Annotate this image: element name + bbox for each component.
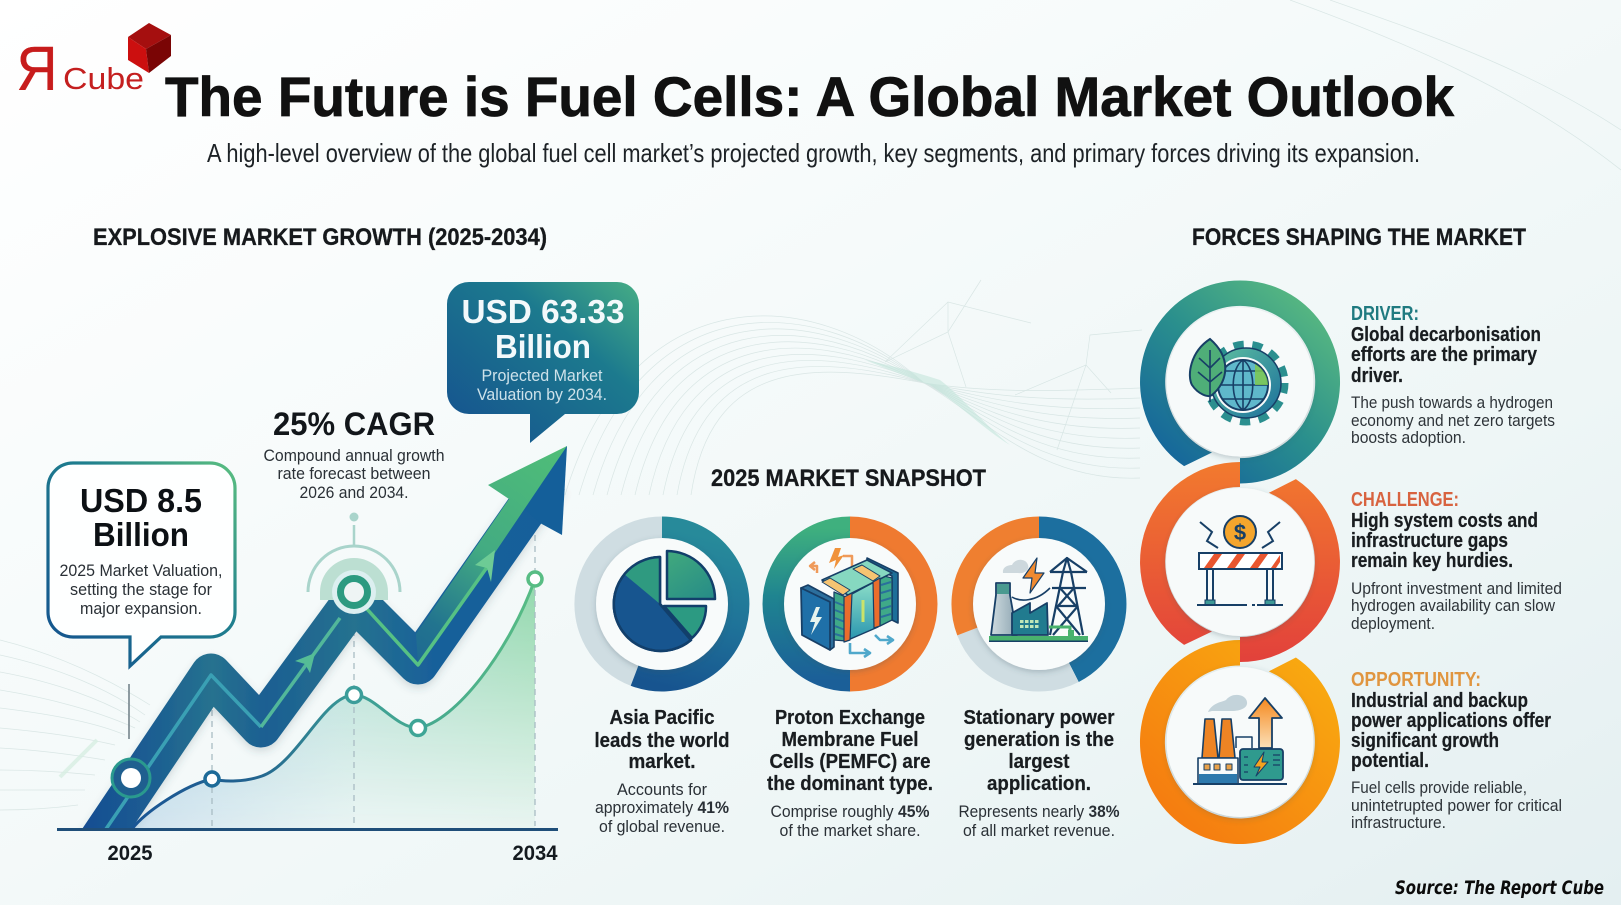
title: The Future is Fuel Cells: A Global Market Outlook	[165, 65, 1455, 128]
vertical marker line	[128, 684, 130, 739]
text: CAGR: 2026 and 2034.	[300, 484, 408, 502]
text: driver: driver.	[1351, 365, 1403, 387]
text: opportunity: OPPORTUNITY:	[1351, 669, 1481, 691]
text: opportunity: potential.	[1351, 750, 1429, 772]
text: stationary power: largest	[1008, 751, 1070, 773]
text: driver: efforts are the primary	[1351, 344, 1538, 366]
text: challenge: remain key hurdies.	[1351, 550, 1513, 572]
text: pemfc: Membrane Fuel	[782, 729, 918, 751]
logo	[16, 23, 171, 104]
callout: 2034 valuation	[447, 282, 639, 443]
icon: cost barrier	[1197, 516, 1283, 605]
text: asia pacific: leads the world	[594, 730, 730, 752]
growth ribbon	[92, 478, 548, 851]
text: challenge: infrastructure gaps	[1351, 530, 1508, 552]
callout: 2034 valuation: Billion	[495, 328, 591, 365]
text: driver: boosts adoption.	[1351, 428, 1466, 447]
logo word: Cube	[63, 61, 144, 96]
text: CAGR: rate forecast between	[278, 465, 430, 483]
convergence glow	[865, 360, 1010, 445]
inner ribbon line rising	[261, 618, 340, 727]
arrow head green	[416, 446, 567, 664]
logo letter: Я	[16, 35, 58, 104]
text: asia pacific: of global revenue.	[599, 818, 725, 836]
text: pemfc: Proton Exchange	[775, 707, 925, 729]
ring: opportunity	[1140, 640, 1340, 844]
marker 2025	[112, 759, 150, 797]
text: CAGR: Compound annual growth	[264, 447, 444, 465]
text: driver: The push towards a hydrogen	[1351, 393, 1553, 412]
donut: pemfc	[774, 528, 926, 680]
text: opportunity: significant growth	[1351, 730, 1499, 752]
area under curve	[154, 588, 535, 825]
text: opportunity: power applications offer	[1351, 710, 1551, 732]
text: driver: economy and net zero targets	[1351, 411, 1555, 430]
green streak	[60, 740, 97, 777]
area blue tint	[132, 695, 354, 829]
text: pemfc: Comprise roughly 45%	[770, 803, 930, 821]
lower curve	[132, 579, 535, 829]
text: asia pacific: Accounts for	[617, 781, 707, 799]
arrow head blue	[505, 446, 567, 535]
text: challenge	[1351, 489, 1562, 633]
callout: 2034 valuation: USD 63.33	[462, 293, 624, 330]
callout: 2025 valuation: USD 8.5	[80, 482, 202, 519]
logo cube	[128, 23, 171, 73]
inner ribbon line	[106, 675, 261, 829]
icon: factory and generator	[1193, 695, 1287, 784]
text: opportunity: unintetrupted power for critical	[1351, 796, 1562, 815]
small arrow 1	[295, 653, 315, 673]
text: opportunity	[1351, 669, 1562, 832]
text: stationary power: Stationary power	[964, 707, 1115, 729]
callout: 2025 valuation: 2025 Market Valuation,	[60, 562, 222, 580]
text: asia pacific: approximately 41%	[595, 799, 729, 817]
panel: market snapshot	[586, 465, 1120, 840]
axis label 2034: 2034	[512, 842, 558, 865]
text: asia pacific	[594, 707, 730, 836]
icon: cost barrier: $	[1234, 520, 1246, 545]
ring: driver	[1140, 281, 1340, 484]
text: challenge: Upfront investment and limited	[1351, 579, 1562, 598]
text: challenge: hydrogen availability can slow	[1351, 596, 1556, 615]
text: opportunity: Industrial and backup	[1351, 690, 1528, 712]
heading: forces: FORCES SHAPING THE MARKET	[1192, 224, 1526, 251]
chart: growth chart	[57, 446, 567, 851]
heading: snapshot: 2025 MARKET SNAPSHOT	[711, 465, 986, 492]
callout: 2025 valuation	[48, 463, 235, 666]
text: driver	[1351, 303, 1555, 447]
callout: 2034 valuation: Projected Market	[482, 367, 603, 385]
callout: 2025 valuation: major expansion.	[80, 600, 202, 618]
panel: forces	[1140, 224, 1562, 844]
dashed guides	[212, 535, 535, 826]
text: pemfc: Cells (PEMFC) are	[770, 751, 930, 773]
text: asia pacific: market.	[628, 751, 696, 773]
text: CAGR	[264, 406, 444, 502]
donut: stationary power	[963, 528, 1115, 680]
icon: power generation	[989, 558, 1088, 642]
icon: leaf and globe gear	[1190, 339, 1284, 421]
axis label 2025: 2025	[108, 842, 153, 865]
callout: 2025 valuation: setting the stage for	[70, 581, 212, 599]
icon: pie chart	[614, 551, 715, 651]
text: pemfc: the dominant type.	[767, 773, 933, 795]
text: opportunity: Fuel cells provide reliable,	[1351, 778, 1527, 797]
text: challenge: deployment.	[1351, 614, 1435, 633]
text: challenge: High system costs and	[1351, 510, 1538, 532]
ring: challenge	[1140, 462, 1340, 662]
text: stationary power: Represents nearly 38%	[958, 803, 1120, 821]
text: asia pacific: Asia Pacific	[610, 707, 714, 729]
callout: 2034 valuation: Valuation by 2034.	[477, 386, 607, 404]
text: challenge: CHALLENGE:	[1351, 489, 1459, 511]
curve nodes	[205, 572, 542, 786]
inner ribbon line green	[366, 563, 490, 665]
text: opportunity: infrastructure.	[1351, 813, 1446, 832]
text: stationary power: application.	[987, 773, 1091, 795]
text: pemfc: of the market share.	[780, 822, 920, 840]
donut: asia pacific	[586, 528, 738, 680]
text: CAGR: 25% CAGR	[273, 406, 435, 442]
small arrow 2	[475, 550, 495, 582]
text: stationary power: generation is the	[964, 729, 1114, 751]
icon: fuel cell stack	[801, 548, 898, 657]
panel: market growth	[48, 224, 639, 865]
marker cagr	[308, 512, 400, 614]
baseline	[57, 828, 558, 831]
callout: 2025 valuation: Billion	[93, 516, 189, 553]
heading: explosive market growth: EXPLOSIVE MARKET GROWTH (2025-2034)	[93, 224, 547, 251]
text: pemfc	[767, 707, 933, 840]
text: driver: Global decarbonisation	[1351, 324, 1541, 346]
text: driver: DRIVER:	[1351, 303, 1419, 325]
text: stationary power	[958, 707, 1120, 840]
subtitle: A high-level overview of the global fuel cell market’s projected growth, key segments, and primary forces driving its expansion.	[207, 138, 1420, 168]
text: stationary power: of all market revenue.	[963, 822, 1115, 840]
